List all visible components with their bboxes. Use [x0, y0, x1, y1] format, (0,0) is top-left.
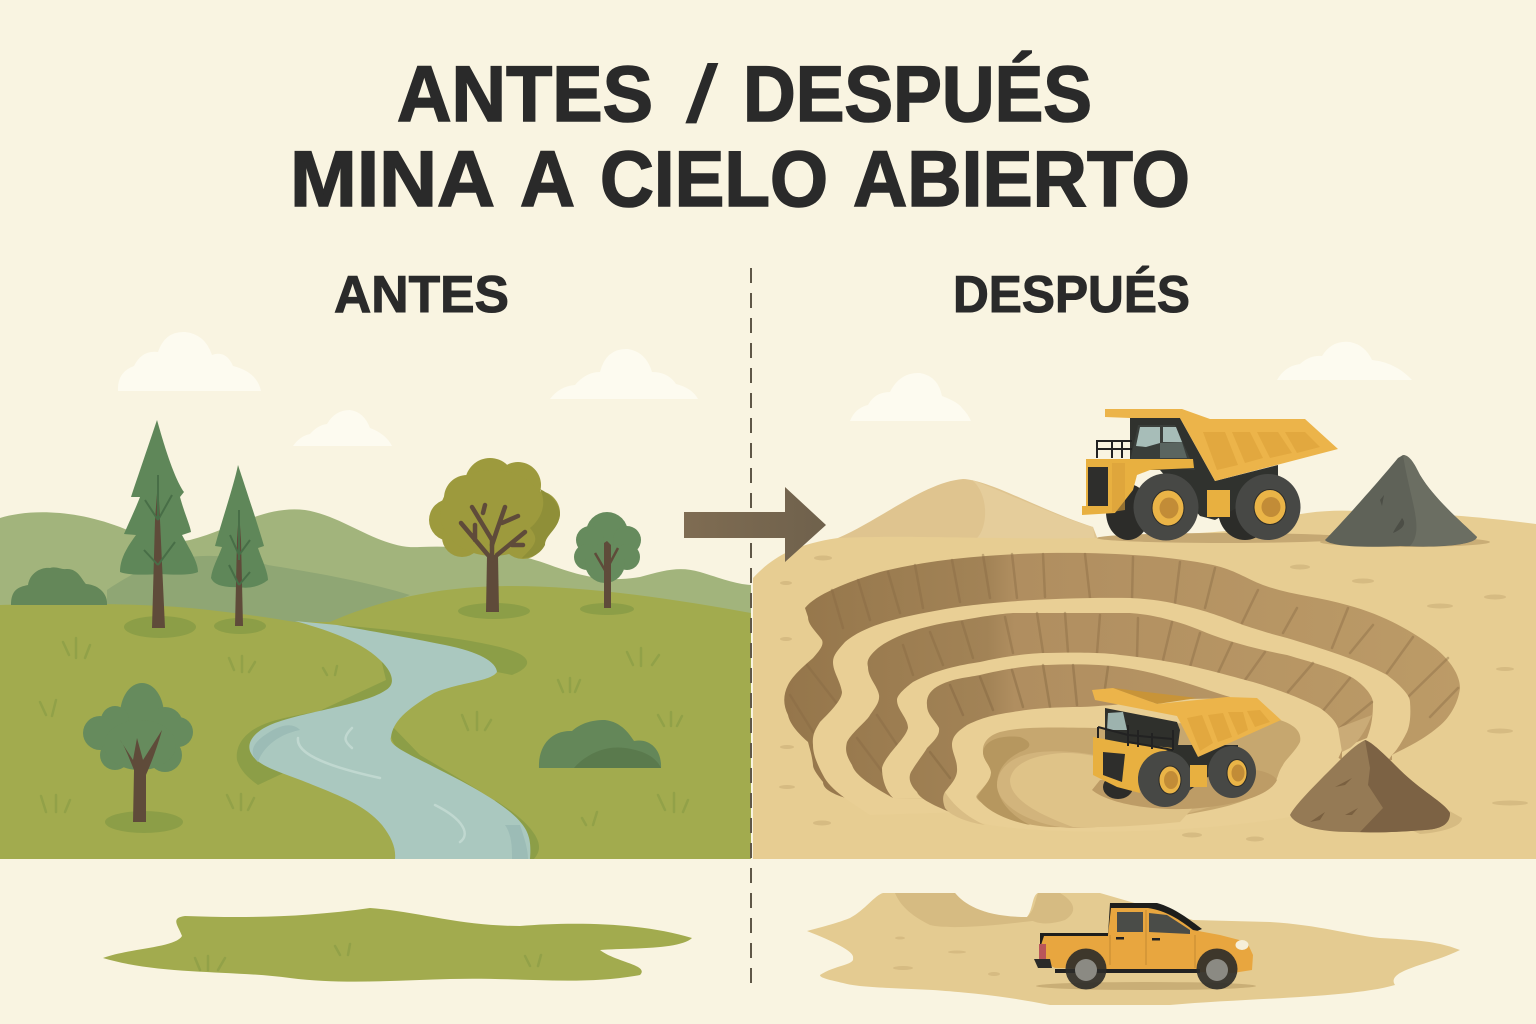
mid hill shade — [107, 556, 410, 625]
clouds left — [118, 332, 698, 446]
bench 2 — [882, 653, 1342, 800]
bush left — [11, 567, 107, 605]
wheel rear — [1066, 948, 1106, 990]
bumper — [1034, 959, 1052, 968]
wheel front — [1134, 474, 1198, 540]
title: ANTES — [397, 49, 653, 138]
pit wall 2 lower wedge — [1338, 715, 1372, 752]
bench 1 — [813, 598, 1410, 815]
pickup truck — [1034, 903, 1256, 990]
floor shadow — [1092, 769, 1277, 809]
headlight — [1236, 940, 1248, 950]
taillight — [1039, 944, 1046, 959]
dump truck small — [1092, 688, 1281, 809]
title: / — [683, 50, 721, 138]
sill — [1055, 969, 1200, 973]
bed panels — [1203, 432, 1320, 470]
door lines — [1110, 910, 1195, 968]
wheel front — [1196, 948, 1238, 990]
round tree right — [574, 512, 641, 615]
heading: antes: ANTES — [334, 266, 509, 324]
title — [290, 49, 1190, 223]
dump bed — [1092, 688, 1281, 757]
cab roof — [1108, 903, 1202, 935]
river highlights — [298, 728, 465, 842]
cab lower glass — [1160, 442, 1187, 458]
pine tree 1 — [120, 420, 198, 638]
front window — [1149, 913, 1190, 934]
title: MINA — [290, 134, 495, 223]
pit wall 2 stripes — [857, 613, 1372, 778]
title: ABIERTO — [853, 134, 1190, 223]
coal pile — [1320, 455, 1490, 547]
hood and body — [1082, 459, 1194, 515]
far sand hill — [838, 479, 1100, 545]
load — [1113, 688, 1197, 704]
bed rail — [1040, 933, 1108, 948]
cab glass — [1107, 712, 1127, 730]
axle box — [1190, 765, 1207, 787]
pit floor dark lobe — [977, 736, 1030, 825]
pine tree 2 — [211, 465, 268, 634]
dump bed — [1105, 409, 1338, 481]
tree foreground — [83, 683, 193, 833]
wheel rear — [1208, 746, 1256, 798]
rear window — [1117, 912, 1143, 932]
bench 3 — [944, 699, 1342, 832]
railing — [1098, 725, 1173, 750]
title: DESPUÉS — [743, 49, 1092, 138]
railing — [1097, 441, 1132, 458]
pit floor inner — [1010, 753, 1200, 827]
bottom strip: green patch — [103, 908, 692, 982]
body — [1040, 908, 1253, 973]
clouds right — [850, 342, 1412, 421]
panel: antes landscape — [0, 332, 751, 859]
grille — [1103, 752, 1125, 782]
right river bank — [337, 625, 527, 675]
bed panels — [1187, 710, 1270, 751]
heading: después: DESPUÉS — [953, 266, 1190, 324]
rear-inner tyres — [1106, 484, 1150, 540]
dirt pile — [1290, 740, 1462, 834]
pit wall 1 stripes — [790, 554, 1458, 732]
bottom strip: sand patch — [807, 893, 1460, 1005]
arrow — [684, 487, 826, 562]
left river bank — [237, 655, 392, 785]
pit wall 2 — [846, 613, 1373, 800]
far hills — [0, 509, 751, 640]
grille — [1088, 467, 1108, 506]
title: CIELO — [600, 134, 828, 223]
pit outer wall — [784, 553, 1460, 800]
panel: después mine — [753, 342, 1536, 859]
wheel front — [1138, 751, 1192, 807]
handles — [1116, 937, 1160, 940]
pit wall 3 — [910, 664, 1230, 815]
title: A — [520, 134, 575, 223]
pit floor mid — [997, 751, 1240, 828]
divider: dashed line — [750, 268, 752, 990]
cab window — [1136, 427, 1182, 447]
olive tree — [429, 458, 560, 619]
sand ground — [753, 511, 1536, 859]
grass tufts — [40, 638, 688, 825]
bush right — [539, 720, 661, 768]
front-left tyre behind — [1103, 775, 1133, 799]
sand flecks — [779, 556, 1528, 842]
ground — [0, 586, 751, 859]
chassis — [1130, 418, 1278, 520]
dump truck large — [1082, 409, 1353, 543]
pit floor ring — [976, 718, 1300, 827]
body — [1093, 737, 1173, 793]
cab — [1130, 425, 1195, 470]
pit wall 3 stripes — [930, 665, 1108, 778]
bench shading — [943, 792, 985, 825]
river — [249, 621, 530, 859]
cab and chassis — [1105, 708, 1238, 790]
wheel rear — [1236, 474, 1300, 540]
axle box — [1207, 490, 1230, 517]
